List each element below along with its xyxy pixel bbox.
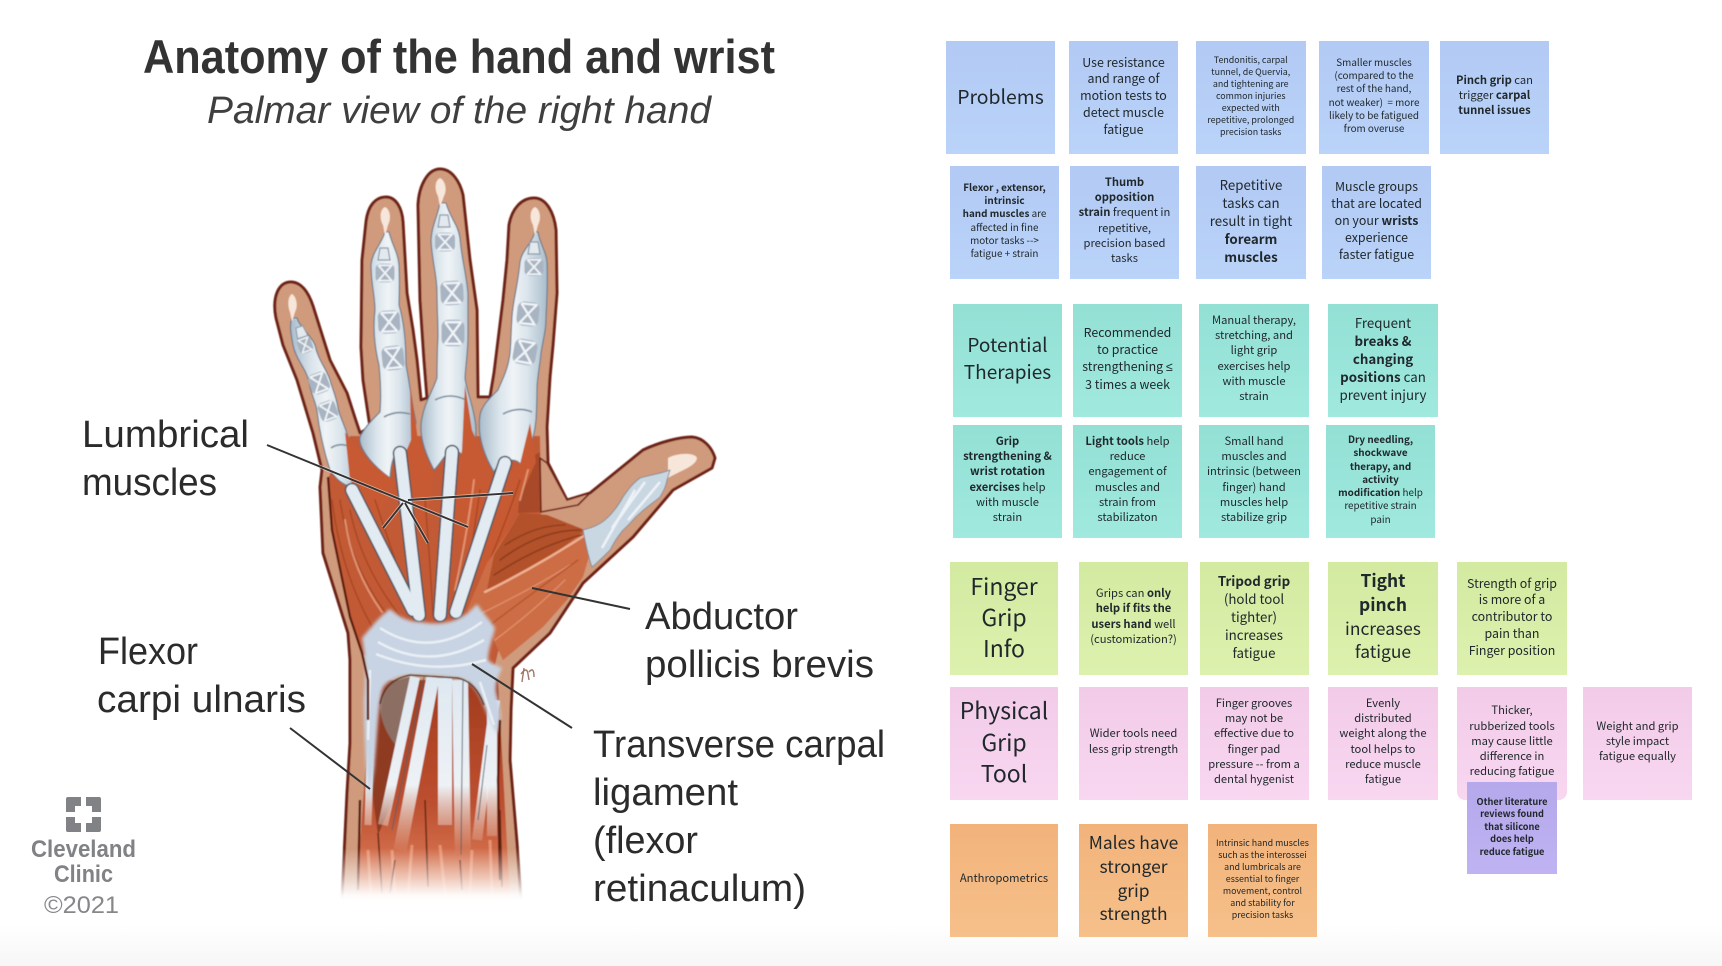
note: Finger Grip Info heading: Finger <box>970 568 1038 602</box>
note: flexor extensor intrinsic: Flexor , extensor, <box>963 180 1046 194</box>
transverse carpal ligament <box>362 604 502 802</box>
note: dry needling: pain <box>1370 512 1391 526</box>
note: intrinsic hand muscles <box>1208 824 1317 937</box>
note: resistance tests: Use resistance <box>1082 52 1165 70</box>
note: resistance tests: fatigue <box>1104 120 1144 138</box>
note: grips fit: Grips can only <box>1096 585 1171 601</box>
note: wider tools: less grip strength <box>1089 740 1178 756</box>
fingertip pads <box>288 178 540 322</box>
note: other literature reviews <box>1467 782 1557 874</box>
note: grips fit: users hand well <box>1091 616 1176 632</box>
note: strength of grip: pain than <box>1485 624 1539 642</box>
note: Anthropometrics heading <box>950 824 1058 937</box>
note: dry needling: modification help <box>1338 485 1423 499</box>
note: finger grooves: effective due to <box>1214 725 1294 741</box>
finger joint windows <box>294 215 544 423</box>
note: dry needling <box>1326 425 1435 538</box>
note: smaller muscles <box>1319 41 1429 154</box>
thenar muscle <box>467 513 593 660</box>
label: Transverse carpal ligament: ligament <box>593 772 738 814</box>
label: Transverse carpal ligament: (flexor <box>593 820 698 862</box>
note: Problems heading: Problems <box>957 81 1044 110</box>
note: manual therapy: light grip <box>1231 342 1277 358</box>
note: grip strengthening: strengthening & <box>963 448 1052 464</box>
knuckle arcs <box>331 396 532 448</box>
note: tight pinch: Tight <box>1360 568 1405 593</box>
note: thumb opposition: tasks <box>1111 250 1138 266</box>
note: flexor extensor intrinsic: intrinsic <box>984 193 1025 207</box>
note: thumb opposition: opposition <box>1095 189 1154 205</box>
note: weight and grip style: style impact <box>1606 733 1669 749</box>
forearm muscle divisions <box>378 800 502 893</box>
title: Anatomy of the hand and wrist <box>143 30 775 83</box>
note: pinch grip: trigger carpal <box>1459 87 1530 103</box>
note: strength of grip: contributor to <box>1472 607 1552 625</box>
thumb pad <box>668 454 697 478</box>
note: resistance tests: detect muscle <box>1083 103 1164 121</box>
logo wordmark: Cleveland <box>31 836 136 863</box>
leader line: flexor carpi ulnaris <box>290 728 370 789</box>
note: weight and grip style <box>1583 687 1692 800</box>
panel: Problems sticky notes <box>946 41 1549 279</box>
note: pinch grip <box>1440 41 1549 154</box>
note: smaller muscles: not weaker) = more <box>1329 94 1419 108</box>
label: Lumbrical muscles <box>82 414 249 504</box>
label: Flexor carpi ulnaris <box>97 631 306 721</box>
note: other literature reviews: does help <box>1490 831 1534 845</box>
label: Abductor pollicis brevis: Abductor <box>645 596 798 638</box>
panel: Finger Grip Info sticky notes <box>950 562 1567 675</box>
forearm tendon dark edges <box>392 677 487 855</box>
note: common injuries: Tendonitis, carpal <box>1214 52 1288 66</box>
note: strength of grip <box>1457 562 1567 675</box>
note: tight pinch: increases <box>1345 616 1421 640</box>
note: intrinsic hand muscles: precision tasks <box>1232 908 1293 920</box>
note: small hand muscles: muscles help <box>1220 494 1288 510</box>
note: wider tools: Wider tools need <box>1090 725 1177 741</box>
note: evenly distributed weight: Evenly <box>1366 695 1400 711</box>
note: Potential Therapies heading: Therapies <box>964 358 1051 384</box>
note: dry needling: shockwave <box>1353 445 1408 459</box>
note: muscle groups: experience <box>1345 228 1408 246</box>
note: resistance tests <box>1069 41 1178 154</box>
note: manual therapy: strain <box>1239 388 1269 404</box>
illustrator signature mark <box>521 668 534 682</box>
note: common injuries: tunnel, de Quervia, <box>1211 64 1290 78</box>
finger sheaths <box>290 203 547 486</box>
note: finger grooves: pressure -- from a <box>1208 756 1300 772</box>
note: Finger Grip Info heading <box>950 562 1058 675</box>
note: frequent breaks: breaks & <box>1354 330 1412 350</box>
bottom fade <box>325 848 540 908</box>
note: males grip strength: Males have <box>1089 830 1178 855</box>
note: manual therapy: with muscle <box>1222 373 1286 389</box>
note: grip strengthening: with muscle <box>976 494 1039 510</box>
note: common injuries: repetitive, prolonged <box>1207 112 1294 126</box>
palm white tendons <box>352 452 505 615</box>
note: wider tools <box>1079 687 1188 800</box>
panel: Potential Therapies sticky notes <box>953 304 1438 538</box>
note: frequent breaks: positions can <box>1340 366 1426 386</box>
note: light tools: engagement of <box>1088 463 1167 479</box>
note: muscle groups: on your wrists <box>1335 211 1418 229</box>
note: dry needling: Dry needling, <box>1348 432 1413 446</box>
palm muscle base <box>328 436 541 665</box>
note: resistance tests: motion tests to <box>1080 86 1167 104</box>
note: dry needling: activity <box>1362 472 1399 486</box>
note: tripod grip: fatigue <box>1233 642 1275 662</box>
note: small hand muscles <box>1199 425 1309 538</box>
note: tripod grip: Tripod grip <box>1218 570 1290 590</box>
note: recommended strengthening: 3 times a week <box>1085 375 1170 393</box>
note: frequent breaks: changing <box>1353 348 1413 368</box>
pinky sheath <box>290 318 362 486</box>
ligament highlights <box>368 622 494 740</box>
note: repetitive tasks: muscles <box>1224 246 1278 266</box>
note: intrinsic hand muscles: such as the interossei <box>1218 848 1307 860</box>
note: repetitive tasks: tasks can <box>1222 192 1280 212</box>
note: recommended strengthening: strengthening ≤ <box>1082 357 1173 375</box>
label: Abductor pollicis brevis: pollicis brevis <box>645 644 874 686</box>
note: finger grooves: dental hygenist <box>1214 771 1294 787</box>
note: evenly distributed weight <box>1328 687 1438 800</box>
note: intrinsic hand muscles: Intrinsic hand muscles <box>1216 836 1309 848</box>
forearm tendons <box>368 677 495 862</box>
copyright: ©2021 <box>44 892 119 919</box>
note: intrinsic hand muscles: essential to finger <box>1226 872 1299 884</box>
note: weight and grip style: fatigue equally <box>1599 748 1676 764</box>
ring sheath and fan <box>360 232 416 478</box>
note: light tools: reduce <box>1110 448 1145 464</box>
note: dry needling: repetitive strain <box>1344 498 1417 512</box>
note: repetitive tasks: Repetitive <box>1220 174 1282 194</box>
label: Transverse carpal ligament: Transverse carpal <box>593 724 885 766</box>
note: Potential Therapies heading <box>953 304 1062 417</box>
note: Physical Grip Tool heading: Grip <box>981 724 1027 758</box>
note: strength of grip: Finger position <box>1469 641 1555 659</box>
note: thumb opposition <box>1070 166 1179 279</box>
note: other literature reviews: that silicone <box>1484 819 1540 833</box>
note: flexor extensor intrinsic: affected in fine <box>971 220 1038 234</box>
note: evenly distributed weight: reduce muscle <box>1345 756 1421 772</box>
note: frequent breaks: Frequent <box>1355 312 1411 332</box>
hand skin outline <box>275 169 715 900</box>
forearm skin lines <box>328 477 500 890</box>
middle sheath and fan <box>421 203 476 470</box>
note: light tools: stabilizaton <box>1097 509 1158 525</box>
note: thicker rubberized tools: may cause little <box>1471 733 1553 749</box>
note: flexor extensor intrinsic: fatigue + strain <box>971 246 1038 260</box>
label: Lumbrical muscles: Lumbrical <box>82 414 249 456</box>
note: grips fit <box>1079 562 1188 675</box>
note: grip strengthening: Grip <box>996 433 1019 449</box>
note: recommended strengthening <box>1073 304 1182 417</box>
pale muscle oval <box>380 677 410 748</box>
note: dry needling: therapy, and <box>1350 459 1411 473</box>
thumb sheath highlights <box>602 482 660 548</box>
note: small hand muscles: intrinsic (between <box>1207 463 1301 479</box>
note: finger grooves <box>1200 687 1308 800</box>
note: thicker rubberized tools: rubberized tools <box>1469 718 1555 734</box>
logo wordmark second line: Clinic <box>54 861 113 888</box>
note: light tools: Light tools help <box>1085 433 1170 449</box>
note: manual therapy: exercises help <box>1218 358 1290 374</box>
panel: Physical Grip Tool sticky notes <box>950 687 1692 874</box>
label: Lumbrical muscles: muscles <box>82 462 217 504</box>
note: common injuries: expected with <box>1222 100 1280 114</box>
note: evenly distributed weight: fatigue <box>1365 771 1401 787</box>
note: Finger Grip Info heading: Grip <box>981 599 1027 633</box>
note: grips fit: (customization?) <box>1090 631 1177 647</box>
note: small hand muscles: stabilize grip <box>1221 509 1287 525</box>
note: flexor extensor intrinsic: motor tasks --> <box>970 233 1039 247</box>
note: small hand muscles: muscles and <box>1221 448 1287 464</box>
note: evenly distributed weight: tool helps to <box>1350 740 1415 756</box>
note: weight and grip style: Weight and grip <box>1596 718 1679 734</box>
note: Finger Grip Info heading: Info <box>983 630 1025 664</box>
forearm muscle light streaks <box>368 840 492 895</box>
note: tripod grip <box>1200 562 1308 675</box>
note: repetitive tasks: result in tight <box>1210 210 1292 230</box>
note: other literature reviews: Other literature <box>1477 794 1547 808</box>
note: Physical Grip Tool heading: Physical <box>960 692 1048 726</box>
note: thicker rubberized tools: difference in <box>1480 748 1544 764</box>
note: evenly distributed weight: distributed <box>1354 710 1412 726</box>
logo icon <box>66 797 101 832</box>
note: thicker rubberized tools <box>1457 687 1567 800</box>
note: repetitive tasks: forearm <box>1225 228 1277 248</box>
wrist dark muscle <box>372 678 410 835</box>
web muscle near index <box>518 452 541 513</box>
label: Transverse carpal ligament: retinaculum) <box>593 868 806 910</box>
thumb sheath <box>583 470 670 567</box>
illustration: hand and wrist <box>275 169 715 908</box>
note: tight pinch: fatigue <box>1355 639 1411 664</box>
note: common injuries: common injuries <box>1216 88 1286 102</box>
label: Transverse carpal ligament <box>593 724 885 910</box>
note: tripod grip: increases <box>1225 624 1283 644</box>
note: muscle groups: Muscle groups <box>1335 177 1418 195</box>
note: light tools: strain from <box>1099 494 1156 510</box>
note: grips fit: help if fits the <box>1096 600 1171 616</box>
forearm muscle bed <box>356 680 510 900</box>
note: tight pinch <box>1328 562 1438 675</box>
label: Abductor pollicis brevis <box>645 596 874 686</box>
note: thicker rubberized tools: Thicker, <box>1491 702 1533 718</box>
note: tripod grip: (hold tool <box>1224 588 1284 608</box>
leader line: abductor pollicis brevis <box>532 588 630 609</box>
note: tripod grip: tighter) <box>1231 606 1277 626</box>
note: other literature reviews: reviews found <box>1480 806 1544 820</box>
note: finger grooves: may not be <box>1225 710 1283 726</box>
note: common injuries: precision tasks <box>1220 124 1281 138</box>
thenar upper dark muscle <box>487 513 585 590</box>
note: thumb opposition: strain frequent in <box>1079 204 1170 220</box>
note: smaller muscles: Smaller muscles <box>1336 55 1412 69</box>
note: manual therapy: stretching, and <box>1215 327 1293 343</box>
label: Flexor carpi ulnaris: carpi ulnaris <box>97 679 306 721</box>
note: common injuries: and tightening are <box>1213 76 1289 90</box>
note: other literature reviews: reduce fatigue <box>1480 844 1544 858</box>
note: Physical Grip Tool heading <box>950 687 1058 800</box>
palm muscle fibres <box>332 470 528 640</box>
note: frequent breaks <box>1328 304 1438 417</box>
note: grip strengthening <box>953 425 1062 538</box>
note: light tools: muscles and <box>1095 478 1160 494</box>
skin web between index and thumb <box>540 458 590 512</box>
leader lines: lumbrical muscles <box>267 445 513 543</box>
note: manual therapy: Manual therapy, <box>1212 312 1296 328</box>
logo: Cleveland Clinic <box>31 797 136 919</box>
note: males grip strength <box>1079 824 1188 937</box>
note: smaller muscles: rest of the hand, <box>1337 81 1411 95</box>
note: thicker rubberized tools: reducing fatigue <box>1470 763 1554 779</box>
thenar muscle fibres <box>478 525 596 640</box>
panel: anatomy illustration <box>31 30 885 919</box>
note: recommended strengthening: Recommended <box>1084 323 1171 341</box>
note: tight pinch: pinch <box>1359 592 1407 617</box>
note: flexor extensor intrinsic: hand muscles are <box>963 206 1046 220</box>
bottom background fade <box>0 925 1722 966</box>
note: smaller muscles: (compared to the <box>1334 68 1414 82</box>
index sheath and fan <box>479 232 547 472</box>
leader line: transverse carpal ligament <box>472 664 572 728</box>
carpal tunnel arch line <box>380 675 484 705</box>
note: Problems heading <box>946 41 1055 154</box>
note: muscle groups <box>1322 166 1431 279</box>
note: small hand muscles: finger) hand <box>1222 478 1286 494</box>
note: muscle groups: faster fatigue <box>1339 245 1414 263</box>
lumbrical muscle slivers <box>345 385 536 600</box>
note: smaller muscles: from overuse <box>1344 121 1404 135</box>
note: finger grooves: Finger grooves <box>1216 695 1292 711</box>
subtitle: Palmar view of the right hand <box>207 90 713 132</box>
note: males grip strength: grip <box>1117 878 1150 902</box>
note: strength of grip: Strength of grip <box>1467 574 1557 592</box>
note: thumb opposition: repetitive, <box>1098 220 1151 236</box>
note: manual therapy <box>1199 304 1309 417</box>
note: intrinsic hand muscles: and lumbricals are <box>1224 860 1301 872</box>
note: thumb opposition: precision based <box>1084 235 1165 251</box>
note: light tools <box>1073 425 1182 538</box>
note: evenly distributed weight: weight along the <box>1339 725 1427 741</box>
note: pinch grip: Pinch grip can <box>1456 72 1533 88</box>
note: males grip strength: stronger <box>1100 854 1167 879</box>
label: Flexor carpi ulnaris: Flexor <box>98 631 198 673</box>
note: strength of grip: is more of a <box>1479 590 1545 608</box>
note: grip strengthening: exercises help <box>969 478 1046 494</box>
panel: Anthropometrics sticky notes <box>950 824 1317 937</box>
note: Potential Therapies heading: Potential <box>967 331 1048 358</box>
note: thumb opposition: Thumb <box>1105 174 1144 190</box>
note: flexor extensor intrinsic <box>950 166 1059 279</box>
note: intrinsic hand muscles: and stability for <box>1230 896 1295 908</box>
note: common injuries <box>1196 41 1306 154</box>
note: grip strengthening: wrist rotation <box>970 463 1045 479</box>
note: intrinsic hand muscles: movement, control <box>1223 884 1302 896</box>
note: pinch grip: tunnel issues <box>1458 102 1531 118</box>
note: muscle groups: that are located <box>1331 194 1422 212</box>
note: finger grooves: finger pad <box>1228 740 1280 756</box>
note: Anthropometrics heading: Anthropometrics <box>960 870 1048 886</box>
note: resistance tests: and range of <box>1088 69 1159 87</box>
note: frequent breaks: prevent injury <box>1339 384 1426 404</box>
note: Physical Grip Tool heading: Tool <box>981 755 1027 789</box>
note: repetitive tasks <box>1196 166 1306 279</box>
note: small hand muscles: Small hand <box>1224 433 1284 449</box>
note: smaller muscles: likely to be fatigued <box>1329 108 1419 122</box>
note: grip strengthening: strain <box>993 509 1022 525</box>
note: recommended strengthening: to practice <box>1097 340 1158 358</box>
note: males grip strength: strength <box>1099 901 1168 926</box>
